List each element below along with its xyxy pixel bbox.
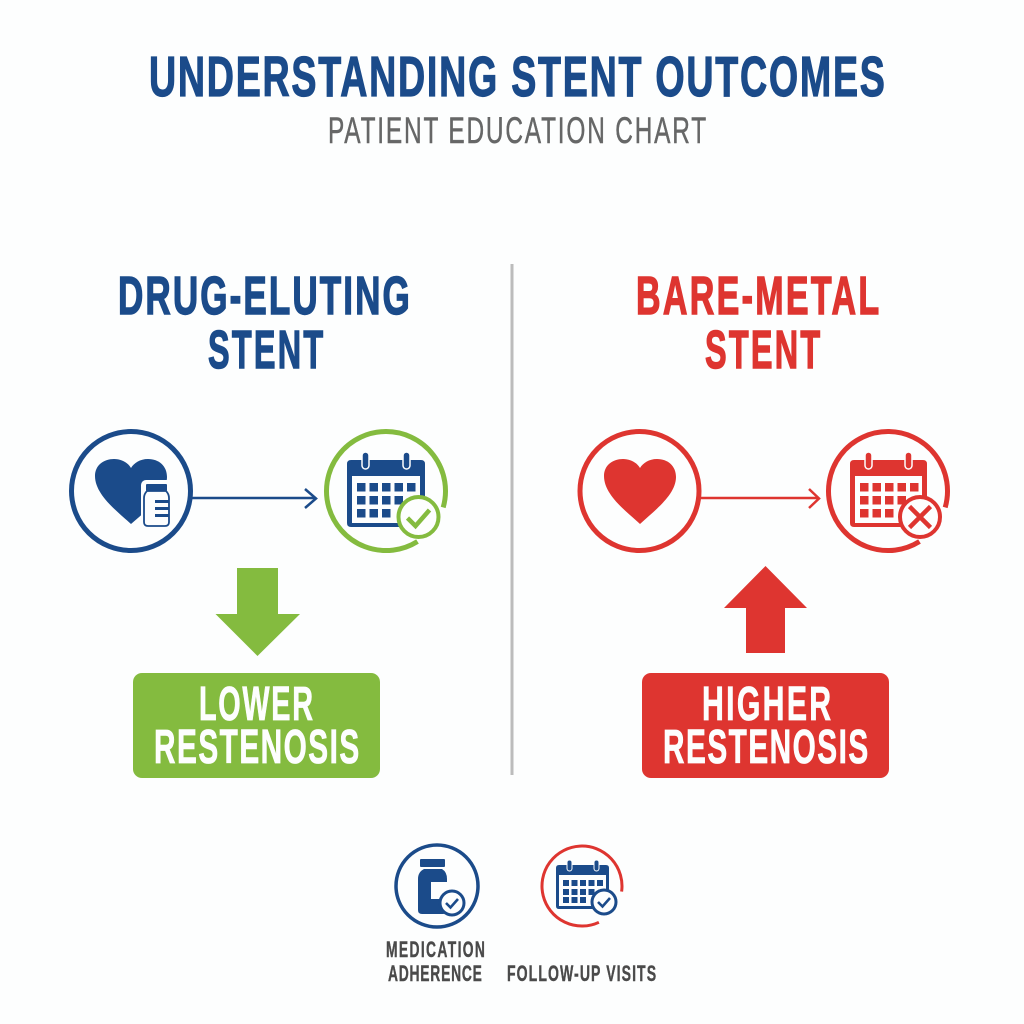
arrow: heart to calendar (192, 489, 316, 508)
legend: follow-up visits (507, 846, 656, 986)
legend: medication adherence (386, 845, 485, 986)
callout: lower restenosis (133, 673, 380, 778)
heading: bare-metal stent (636, 265, 879, 380)
label: medication adherence (386, 937, 485, 986)
label: medication adherence: ADHERENCE (388, 961, 482, 986)
panel: drug-eluting stent (72, 265, 445, 778)
callout: higher restenosis: HIGHER (702, 678, 831, 731)
label: medication adherence: MEDICATION (386, 937, 485, 962)
icon: calendar with check (326, 432, 445, 551)
callout: lower restenosis: LOWER (199, 678, 313, 731)
callout: higher restenosis: RESTENOSIS (663, 721, 868, 774)
callout: lower restenosis: RESTENOSIS (154, 721, 359, 774)
heading: drug-eluting stent: DRUG-ELUTING (118, 265, 410, 326)
icon: medication bottle with check (396, 845, 478, 927)
arrow: heart to calendar (700, 489, 819, 508)
subtitle: PATIENT EDUCATION CHART (328, 110, 706, 151)
label: follow-up visits: FOLLOW-UP VISITS (507, 961, 656, 986)
heading: bare-metal stent: BARE-METAL (636, 265, 879, 326)
heading: drug-eluting stent (118, 265, 410, 380)
heading: bare-metal stent: STENT (705, 321, 820, 380)
title: UNDERSTANDING STENT OUTCOMES (149, 45, 885, 109)
icon: heart (580, 432, 699, 550)
icon: heart with medication bottle (72, 432, 190, 550)
icon: calendar with cross (828, 432, 947, 551)
heading: drug-eluting stent: STENT (208, 321, 323, 380)
callout: higher restenosis (642, 673, 889, 778)
arrow: up (724, 566, 807, 653)
panel: bare-metal stent (580, 265, 947, 778)
arrow: down (216, 568, 300, 656)
icon: calendar with check (542, 846, 622, 926)
